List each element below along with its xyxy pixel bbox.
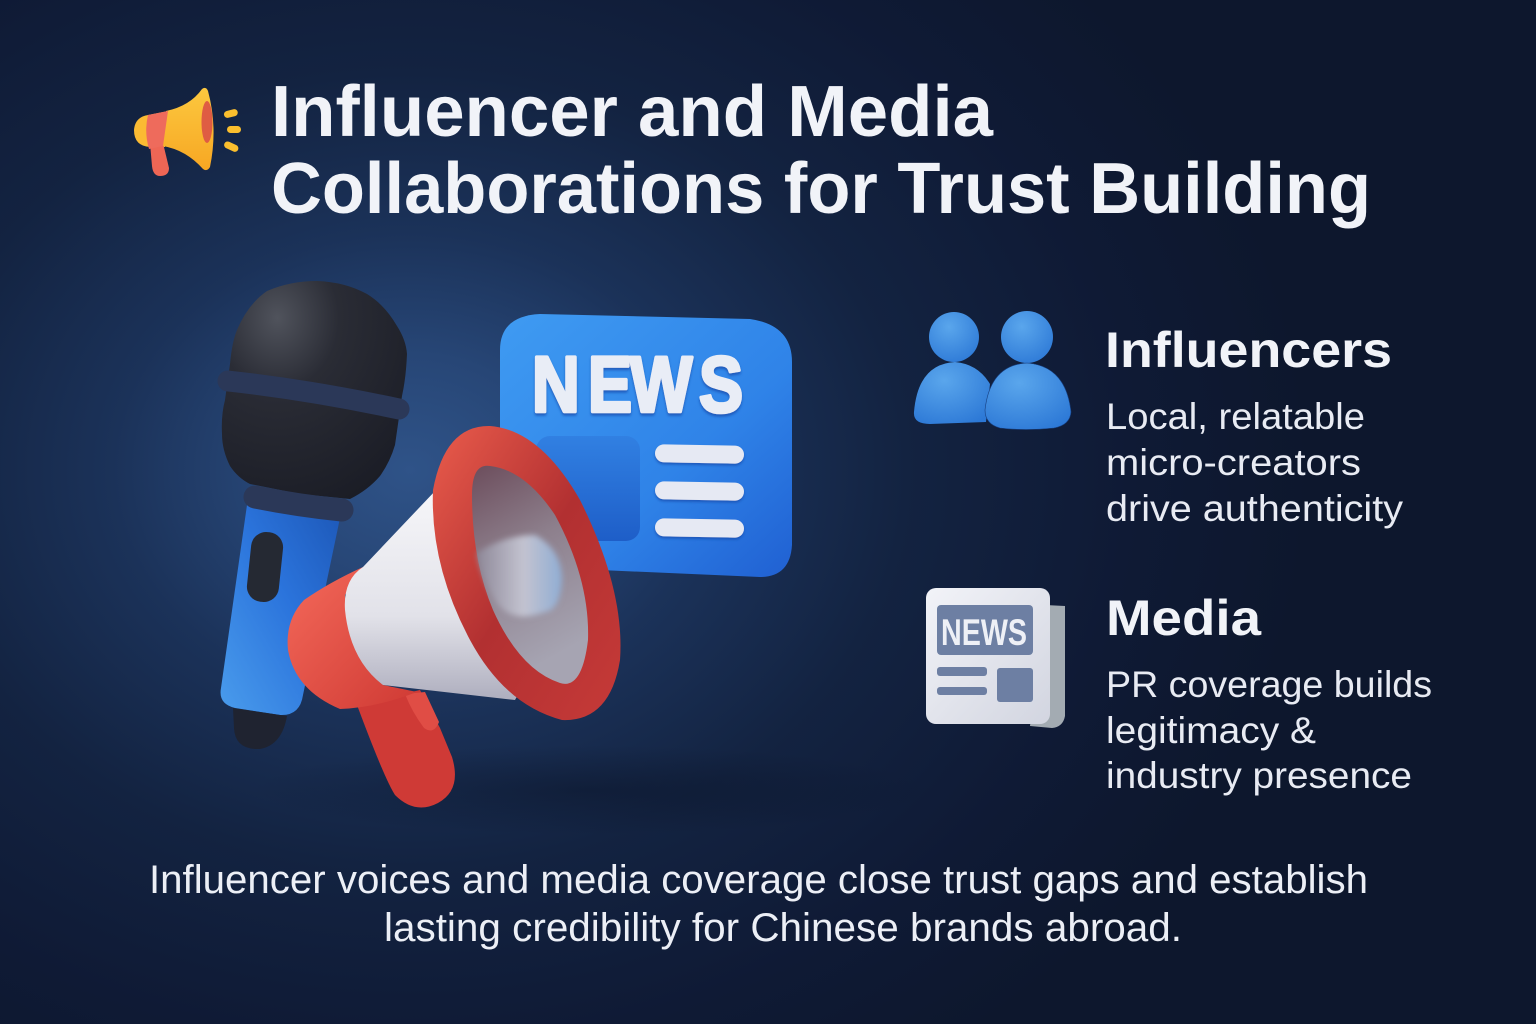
text: media description: PR coverage builds [1106, 664, 1432, 705]
text: influencers description [1106, 396, 1404, 529]
illustration: microphone [221, 281, 407, 749]
icon: newspaper: NEWS [941, 612, 1027, 653]
icon: newspaper [926, 588, 1065, 728]
heading: media: Media [1106, 590, 1262, 646]
closing statement: Influencer voices and media coverage close trust gaps and establish [149, 858, 1368, 902]
illustration: news card [500, 314, 792, 577]
text: media description: industry presence [1106, 755, 1412, 796]
title: Collaborations for Trust Building [271, 149, 1371, 229]
icon: small megaphone [134, 88, 241, 176]
text: media description: legitimacy & [1106, 710, 1316, 751]
news card heading: NEWS [532, 341, 743, 429]
title: Influencer and Media [271, 72, 994, 152]
text: influencers description: Local, relatable [1106, 396, 1365, 437]
closing statement: lasting credibility for Chinese brands abroad. [384, 906, 1182, 950]
text: influencers description: drive authenticity [1106, 488, 1404, 529]
closing statement [149, 858, 1368, 950]
text: influencers description: micro-creators [1106, 442, 1361, 483]
title [271, 72, 1371, 229]
text: media description [1106, 664, 1432, 796]
icon: influencers [914, 311, 1071, 430]
heading: influencers: Influencers [1105, 322, 1392, 378]
illustration: megaphone [288, 426, 620, 808]
